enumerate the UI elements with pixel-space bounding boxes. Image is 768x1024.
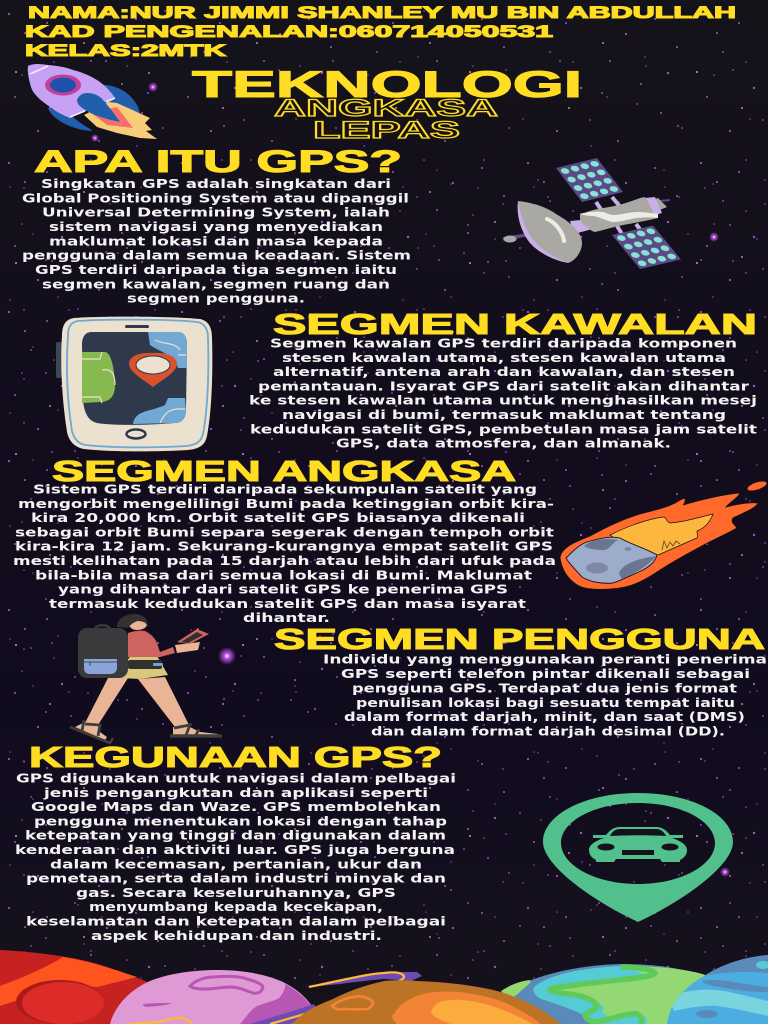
text block: apa itu gps: pengguna dalam semua keadaan. Sistem [22,248,411,263]
icon: phone with map pin [56,317,212,451]
planet: blue [667,955,768,1024]
text block: apa itu gps [22,176,411,306]
text block: segmen kawalan: navigasi di bumi, termasuk maklumat tentang [282,407,726,422]
heading: kegunaan gps: KEGUNAAN GPS? [29,742,442,774]
text block: segmen angkasa [13,482,556,625]
text block: kegunaan gps [15,770,456,943]
text block: segmen kawalan: kedudukan satelit GPS, pembetulan masa jam satelit [250,421,757,436]
text block: segmen pengguna [323,652,767,739]
icon: meteor [560,480,768,589]
text block: segmen pengguna: dan dalam format darjah desimal (DD). [371,724,725,739]
text block: segmen pengguna: pengguna GPS. Terdapat dua jenis format [352,680,737,695]
header: student details: KELAS:2MTK [25,42,226,60]
text block: segmen pengguna: penulisan lokasi bagi sesuatu tempat iaitu [356,695,735,710]
icon: walking person with backpack [70,614,222,743]
text block: kegunaan gps: pengguna menentukan lokasi dengan tahap [34,813,447,828]
text block: segmen angkasa: sebagai orbit Bumi separa segerak dengan tempoh orbit [15,524,554,539]
text block: kegunaan gps: kenderaan dan aktiviti luar. GPS juga berguna [15,842,455,857]
planet: red [0,950,216,1024]
planet: pink [110,970,322,1024]
text block: kegunaan gps: GPS digunakan untuk navigasi dalam pelbagai [16,770,456,786]
heading: apa itu gps: APA ITU GPS? [34,143,402,179]
text block: segmen angkasa: bila-bila masa dari semua lokasi di Bumi. Maklumat [35,567,532,582]
header: student details: KAD PENGENALAN:060714050531 [25,23,553,41]
text block: segmen kawalan [249,336,757,451]
text block: kegunaan gps: keselamatan dan ketepatan dalam pelbagai [26,914,446,928]
text block: apa itu gps: GPS terdiri daripada tiga segmen iaitu [35,262,397,277]
text block: segmen pengguna: GPS seperti telefon pintar dikenali sebagai [341,666,750,681]
heading: segmen pengguna: SEGMEN PENGGUNA [274,624,765,656]
text block: segmen angkasa: Sistem GPS terdiri daripada sekumpulan satelit yang [33,482,537,496]
text block: segmen angkasa: kira 20,000 km. Orbit satelit GPS biasanya dikenali [31,510,525,525]
title: LEPAS [313,117,460,144]
text block: apa itu gps: Global Positioning System atau dipanggil [22,190,409,205]
text block: kegunaan gps: aspek kehidupan dan industri. [91,928,382,943]
header: student details [25,4,736,60]
text block: kegunaan gps: Google Maps dan Waze. GPS membolehkan [31,799,441,814]
title [192,64,582,144]
text block: segmen kawalan: alternatif, antena arah dan kawalan, dan stesen [273,364,735,379]
text block: segmen kawalan: GPS, data atmosfera, dan almanak. [336,436,671,451]
text block: kegunaan gps: pemetaan, serta dalam industri minyak dan [26,871,446,886]
icon: satellite [503,158,681,269]
planet: orange [292,980,561,1024]
text block: segmen angkasa: yang dihantar dari satelit GPS ke penerima GPS [58,582,508,597]
planet: blue and green [470,964,720,1024]
heading: segmen angkasa: SEGMEN ANGKASA [52,456,516,488]
text block: segmen kawalan: pemantauan. Isyarat GPS dari satelit akan dihantar [258,378,750,393]
text block: segmen angkasa: mesti kelihatan pada 15 darjah atau lebih dari ufuk pada [13,553,556,568]
text block: kegunaan gps: menyumbang kepada kecekapan, [89,899,383,914]
text block: segmen angkasa: mengorbit mengelilingi Bumi pada ketinggian orbit kira- [18,496,554,511]
planet ring: orange and purple [250,972,422,1024]
text block: segmen angkasa: dihantar. [243,610,330,625]
title: ANGKASA [274,95,498,122]
text block: apa itu gps: Universal Determining System, ialah [42,205,390,220]
text block: segmen kawalan: Segmen kawalan GPS terdiri daripada komponen [270,336,737,350]
text block: apa itu gps: Singkatan GPS adalah singkatan dari [41,176,391,191]
text block: apa itu gps: segmen pengguna. [127,291,305,306]
text block: kegunaan gps: ketepatan yang tinggi dan digunakan dalam [25,828,446,843]
text block: segmen angkasa: termasuk kedudukan satelit GPS dan masa isyarat [49,596,526,611]
text block: apa itu gps: maklumat lokasi dan masa kepada [49,233,383,248]
title: TEKNOLOGI [192,64,582,105]
icon: rocket [28,64,157,139]
text block: apa itu gps: sistem navigasi yang menyediakan [49,219,383,234]
text block: segmen kawalan: stesen kawalan utama, stesen kawalan utama [282,350,726,365]
icon: green location pin with car [543,793,733,922]
text block: kegunaan gps: gas. Secara keseluruhannya, GPS [76,885,396,900]
text block: segmen pengguna: dalam format darjah, minit, dan saat (DMS) [344,709,745,724]
text block: kegunaan gps: dalam kecemasan, pertanian, ukur dan [50,856,422,871]
text block: segmen kawalan: ke stesen kawalan utama untuk menghasilkan mesej [249,393,757,408]
text block: kegunaan gps: jenis pengangkutan dan aplikasi seperti [43,785,428,800]
text block: segmen angkasa: kira-kira 12 jam. Sekurang-kurangnya empat satelit GPS [15,539,553,554]
heading: segmen kawalan: SEGMEN KAWALAN [273,309,757,341]
text block: apa itu gps: segmen kawalan, segmen ruang dan [42,276,390,291]
header: student details: NAMA:NUR JIMMI SHANLEY MU BIN ABDULLAH [28,4,736,22]
text block: segmen pengguna: Individu yang menggunakan peranti penerima [323,652,767,666]
